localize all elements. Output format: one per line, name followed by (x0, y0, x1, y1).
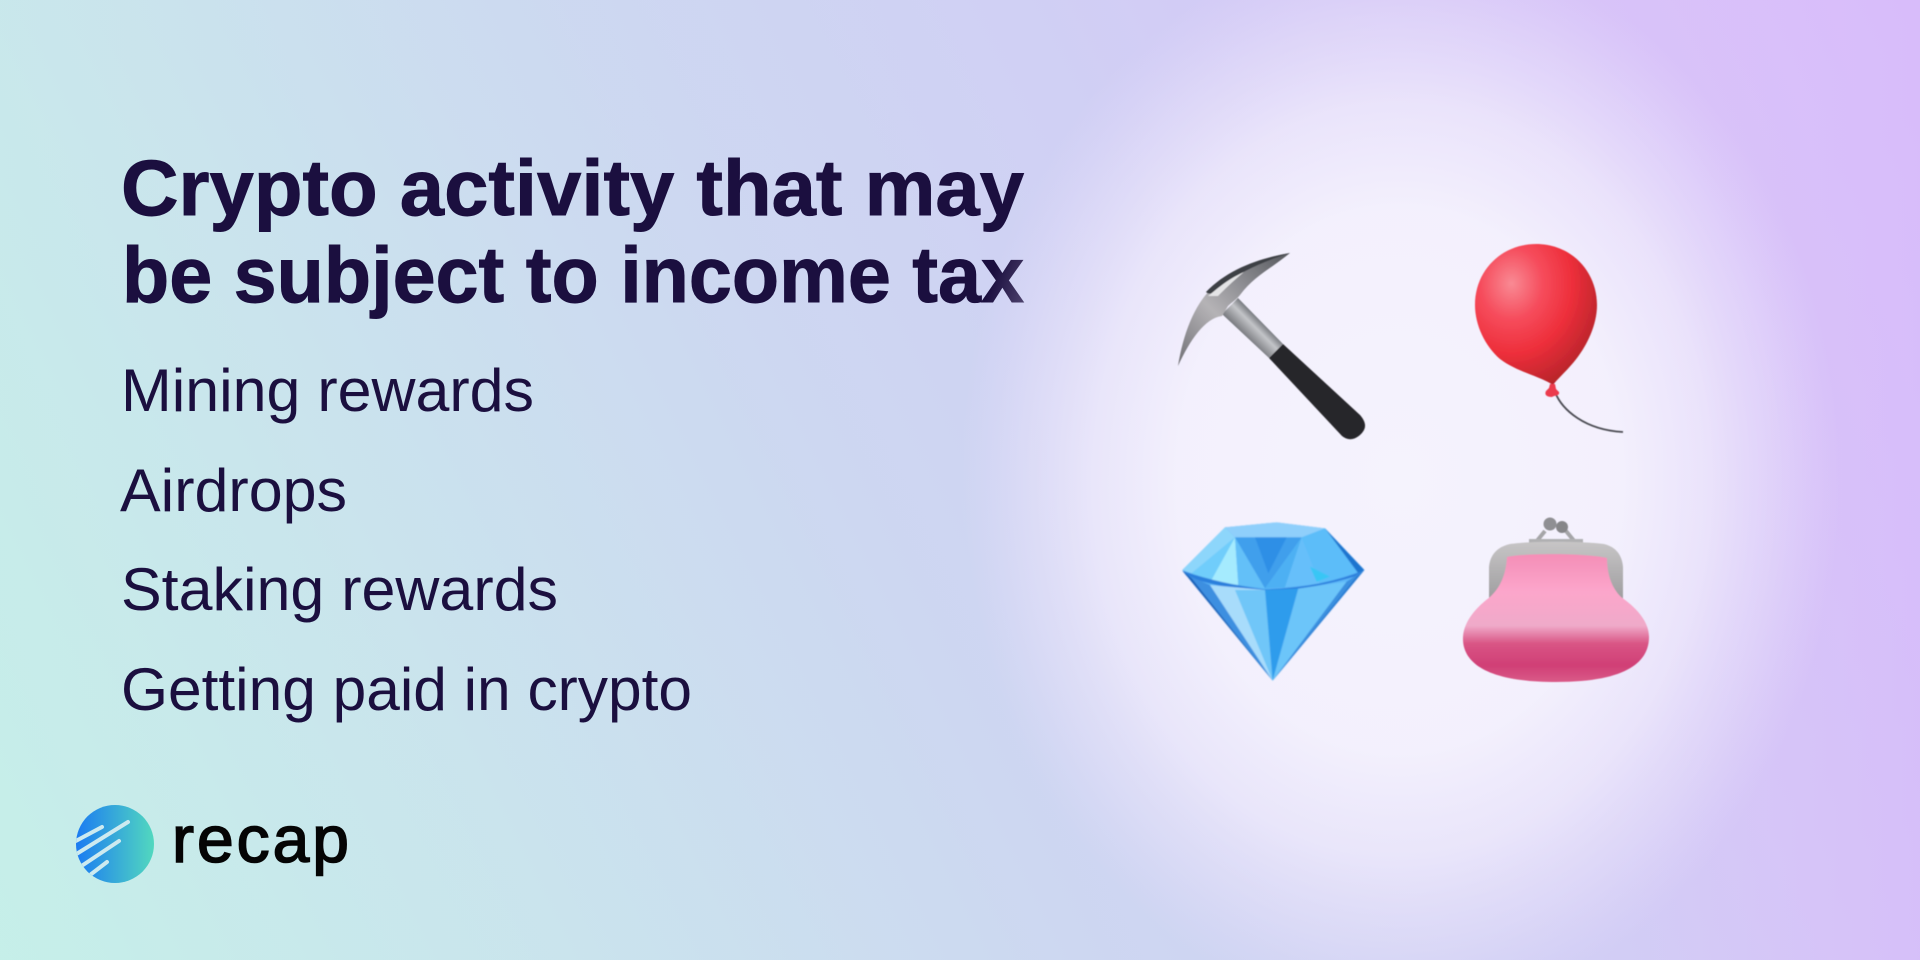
white glow (950, 0, 1920, 960)
title: be subject to income tax (122, 230, 1024, 319)
title: Crypto activity that may (121, 143, 1024, 232)
item: mining rewards: Mining rewards (121, 357, 534, 424)
item: airdrops: Airdrops (120, 457, 347, 524)
logo mark (70, 805, 154, 883)
icon: pickaxe (1178, 253, 1365, 439)
icon: diamond (1182, 522, 1364, 681)
activity list (120, 357, 692, 723)
logo (70, 802, 349, 883)
icon: balloon (1475, 244, 1623, 432)
icon: coin purse (1463, 518, 1649, 682)
item: getting paid in crypto: Getting paid in crypto (121, 656, 692, 723)
title (121, 143, 1024, 319)
item: staking rewards: Staking rewards (121, 556, 558, 623)
logo wordmark: recap (172, 802, 349, 876)
